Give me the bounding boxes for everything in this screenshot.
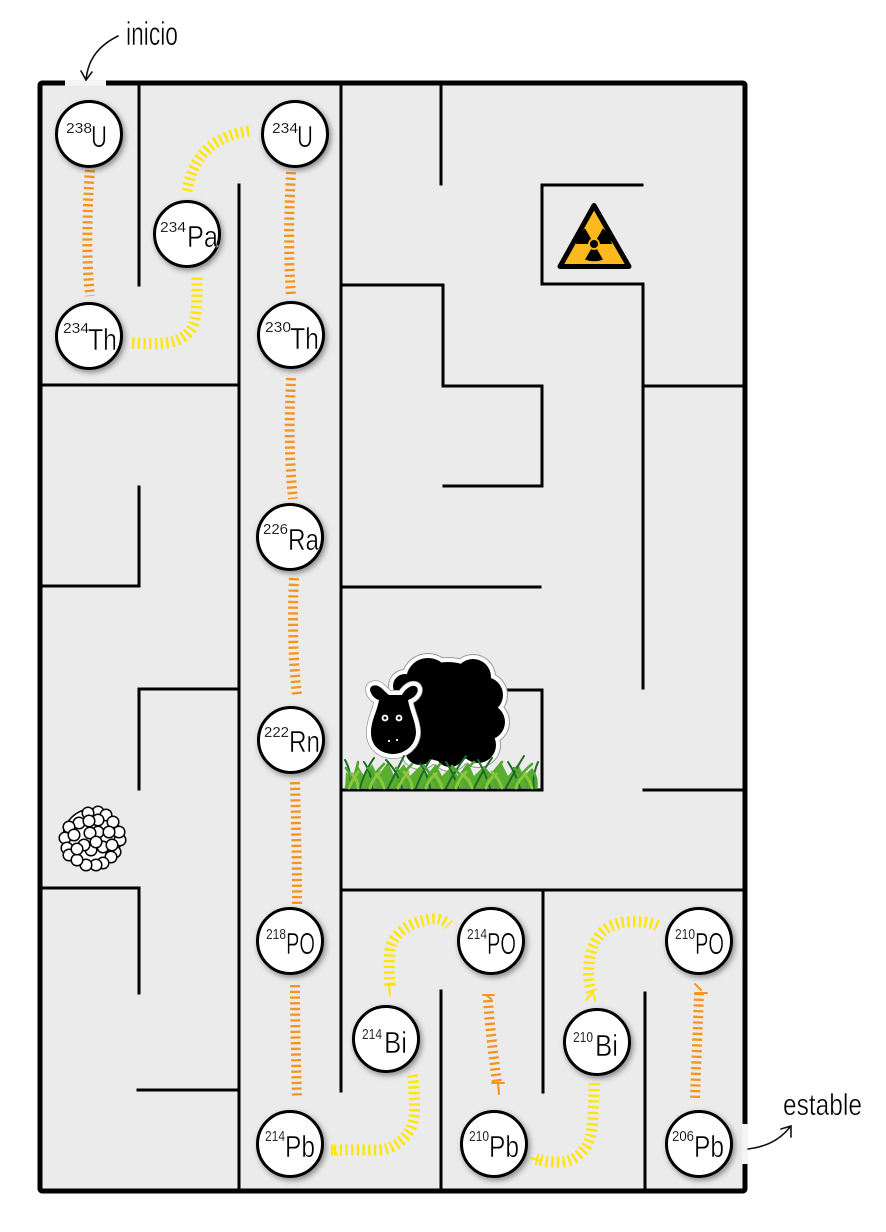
- node: 230Th: 230: [265, 319, 291, 336]
- decay arrow: 214Po to 210Pb: [483, 995, 504, 1094]
- node: 214Pb: 214: [265, 1128, 285, 1145]
- node: 210Po: 210: [675, 926, 695, 943]
- node: 234Pa: 234: [160, 219, 186, 236]
- node: 210Po: PO: [695, 926, 724, 961]
- arrow: estable: [748, 1126, 791, 1149]
- sheep body: [388, 653, 510, 772]
- node: 234U: [262, 102, 328, 166]
- decay arrow: 222Rn to 218Po: [295, 782, 297, 906]
- node: 226Ra: [258, 504, 322, 570]
- decay arrow: 238U to 234Th: [87, 170, 90, 296]
- node: 206Pb: Pb: [694, 1129, 724, 1164]
- node: 222Rn: 222: [264, 724, 289, 741]
- node: 234Th: Th: [88, 322, 117, 357]
- node: 214Pb: [258, 1112, 322, 1176]
- node: 206Pb: [666, 1112, 732, 1176]
- label: inicio: inicio: [126, 15, 178, 52]
- node: 210Pb: [462, 1112, 526, 1176]
- node: 218Po: PO: [286, 926, 315, 961]
- node: 210Po: [666, 908, 732, 974]
- node: 214Po: 214: [467, 926, 487, 943]
- node: 214Bi: [354, 1006, 418, 1072]
- node: 230Th: [258, 302, 324, 368]
- decay arrow: 234U to 230Th: [289, 172, 291, 296]
- exit gap: [742, 1124, 748, 1164]
- arrow: inicio: [81, 36, 118, 80]
- node: 234Th: 234: [63, 320, 89, 337]
- maze inner walls: [41, 85, 744, 1190]
- decay arrow: 210Bi to 210Po: [586, 922, 658, 1000]
- decay arrow: 234Pa to 234U: [187, 131, 249, 191]
- entrance gap: [65, 80, 106, 86]
- node: 210Bi: [564, 1010, 630, 1074]
- node: 214Bi: 214: [362, 1026, 382, 1043]
- decay arrow: 226Ra to 222Rn: [293, 578, 297, 695]
- decay arrow: 210Po to 206Pb: [695, 984, 707, 1100]
- node: 230Th: Th: [290, 321, 319, 356]
- node: 218Po: 218: [266, 926, 286, 943]
- illustration: black sheep on grass: [345, 653, 538, 788]
- node: 222Rn: Rn: [289, 724, 320, 759]
- decay arrow: 218Po to 214Pb: [295, 985, 297, 1098]
- label: estable: estable: [783, 1087, 862, 1122]
- decay arrow: 230Th to 226Ra: [290, 378, 293, 499]
- icon: radiation warning sign: [560, 206, 629, 266]
- node: 214Pb: Pb: [285, 1129, 315, 1164]
- icon: atomic nucleus: [59, 806, 126, 871]
- node: 210Bi: 210: [573, 1029, 593, 1046]
- node: 226Ra: Ra: [288, 522, 320, 557]
- node: 210Bi: Bi: [595, 1028, 618, 1063]
- node: 234U: 234: [272, 120, 298, 137]
- node: 238U: U: [91, 119, 107, 154]
- node: 238U: [56, 102, 122, 166]
- maze outer border: [40, 83, 745, 1191]
- node: 214Po: [458, 908, 524, 974]
- node: 234Th: [56, 304, 122, 368]
- grass: [345, 756, 538, 788]
- node: 214Po: PO: [487, 926, 516, 961]
- node: 226Ra: 226: [263, 521, 288, 538]
- node: 234Pa: [154, 202, 220, 266]
- decay arrow: 210Pb to 210Bi: [531, 1083, 594, 1164]
- node: 234Pa: Pa: [187, 219, 219, 254]
- node: 234U: U: [297, 119, 313, 154]
- node: 238U: 238: [66, 120, 92, 137]
- node: 206Pb: 206: [672, 1128, 694, 1145]
- decay arrow: 214Bi to 214Po: [385, 919, 449, 995]
- decay arrow: 234Th to 234Pa: [132, 277, 197, 344]
- node: 210Pb: Pb: [489, 1129, 519, 1164]
- maze panel: [40, 83, 745, 1191]
- node: 222Rn: [258, 708, 324, 772]
- decay arrow: 214Pb to 214Bi: [332, 1072, 415, 1155]
- node: 214Bi: Bi: [384, 1025, 407, 1060]
- sheep head: [370, 685, 418, 754]
- node: 210Pb: 210: [469, 1128, 489, 1145]
- node: 218Po: [258, 908, 322, 974]
